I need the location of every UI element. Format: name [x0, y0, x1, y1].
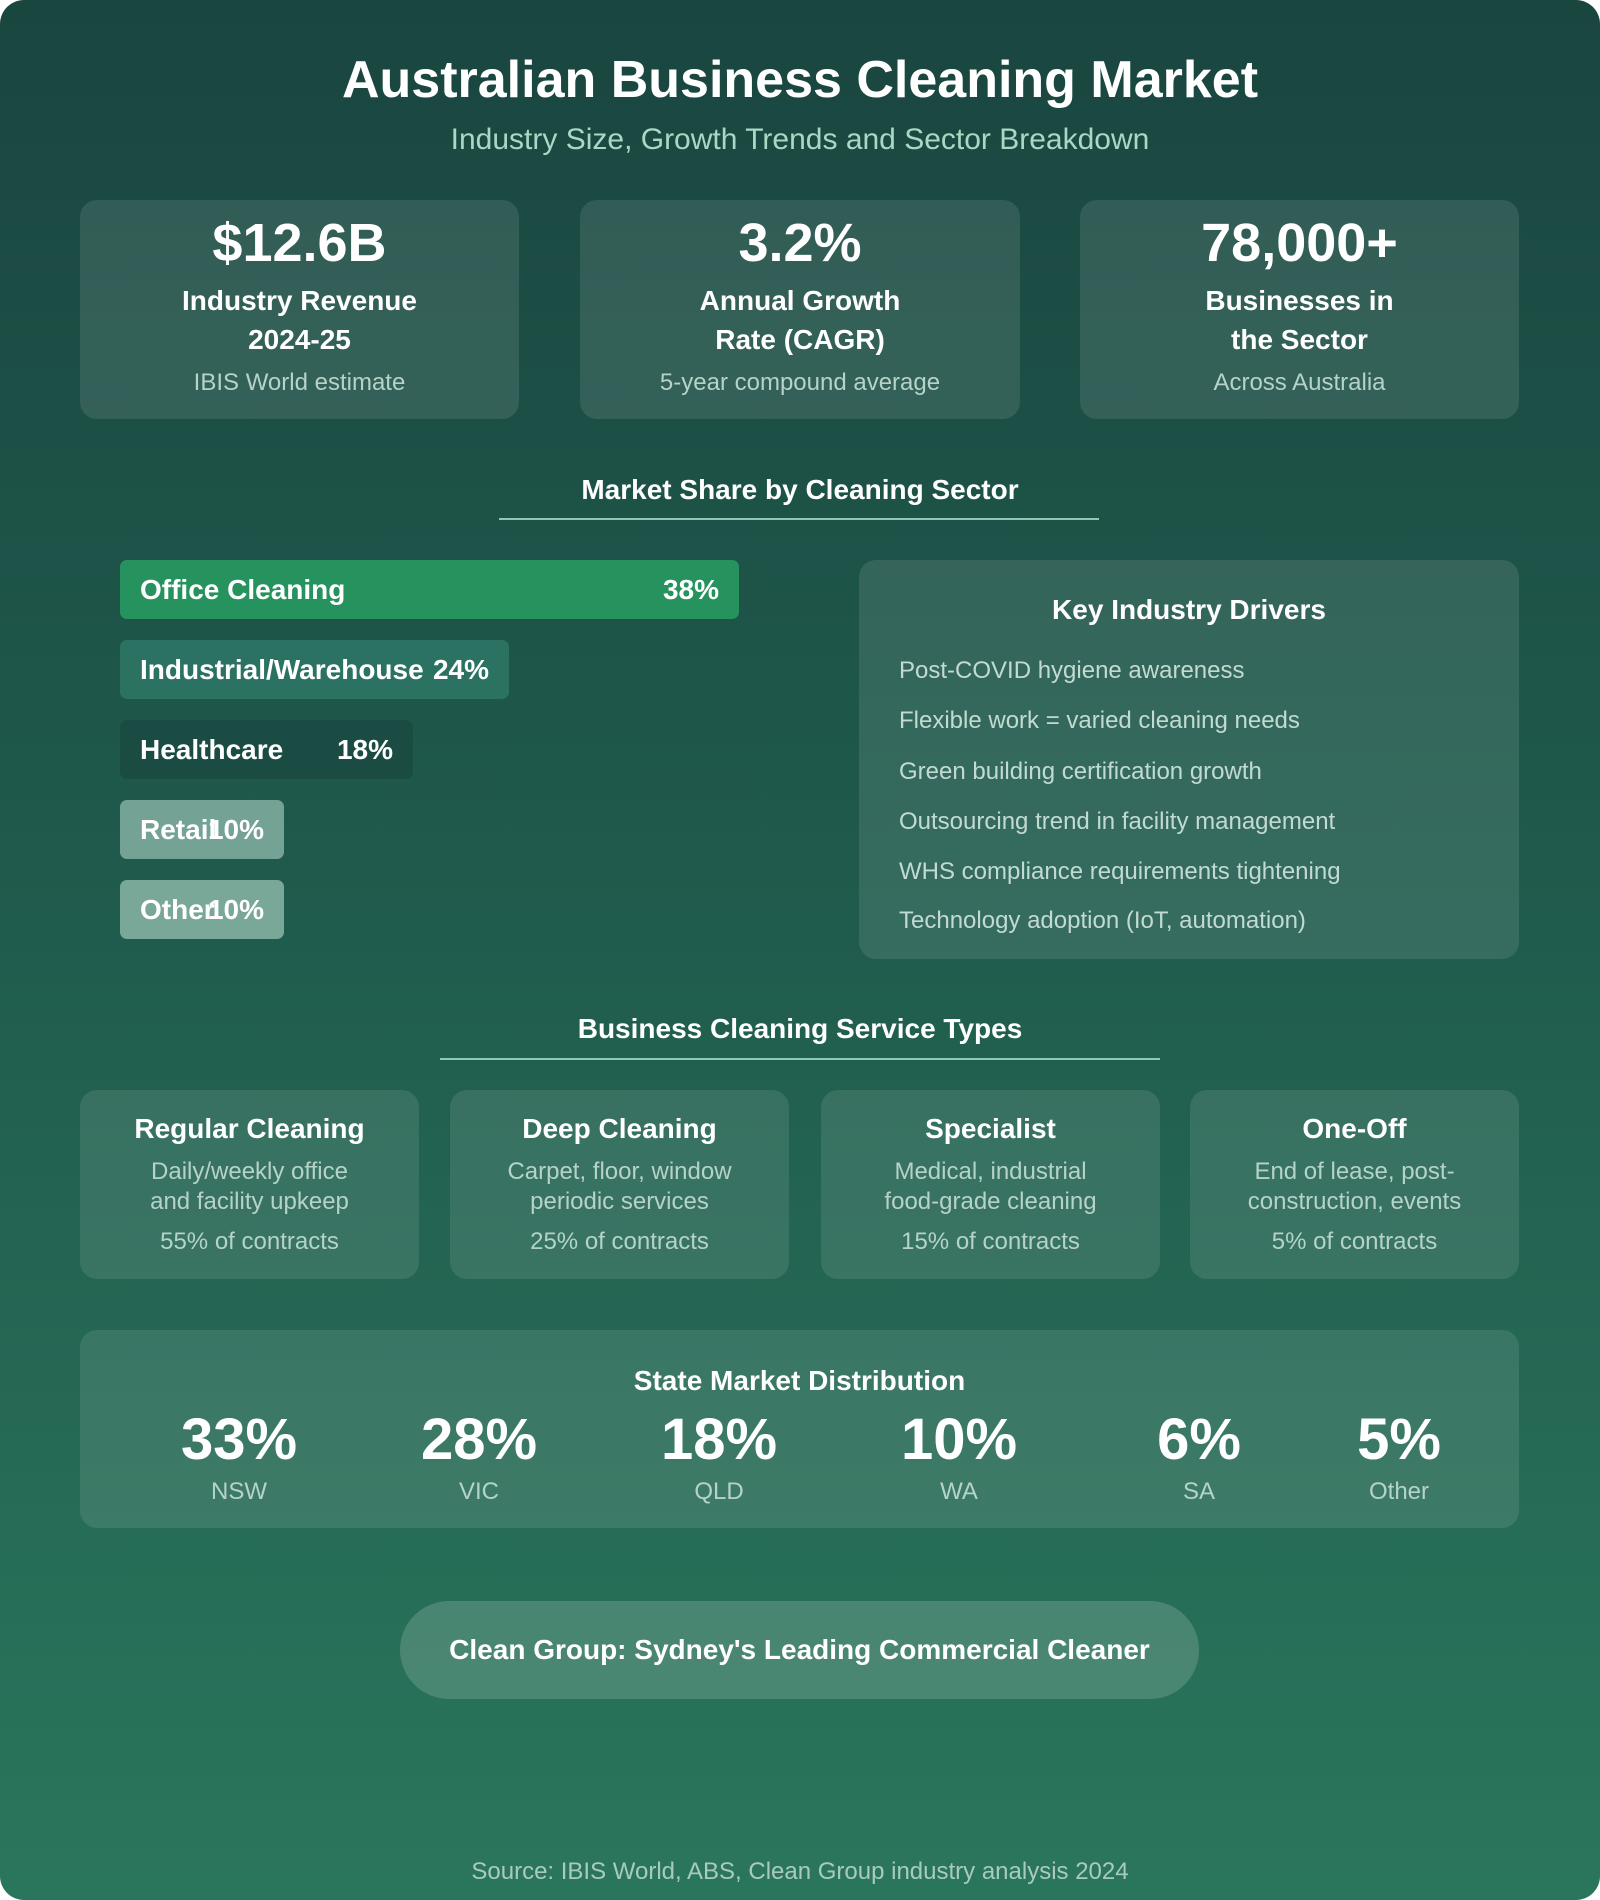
bar: retail: 10%: [208, 814, 264, 845]
service card: specialist: 15% of contracts: [901, 1228, 1080, 1255]
service card: regular: Regular Cleaning: [134, 1113, 365, 1144]
service card: regular: Daily/weekly office: [151, 1158, 348, 1185]
service card: deep: periodic services: [530, 1188, 709, 1215]
bar: retail: Retail: [140, 814, 216, 845]
stat card: growth: Annual Growth: [700, 285, 900, 316]
bar: other: Other: [140, 894, 215, 925]
bar: other: 10%: [208, 894, 264, 925]
stat card: businesses: the Sector: [1231, 324, 1368, 355]
stat card: revenue: [80, 200, 519, 419]
service card: one-off: construction, events: [1248, 1188, 1461, 1215]
bar chart: market share: [120, 560, 739, 939]
bar: industrial: Industrial/Warehouse: [140, 654, 424, 685]
stat: SA: [1157, 1407, 1241, 1505]
service card: one-off: End of lease, post-: [1254, 1158, 1455, 1185]
panel: state distribution: 18%: [661, 1407, 777, 1472]
stat card: revenue: $12.6B: [212, 213, 387, 273]
panel: state distribution: 10%: [901, 1407, 1017, 1472]
service card: specialist: [821, 1090, 1160, 1279]
panel: state distribution: WA: [940, 1478, 978, 1505]
service card: deep: Deep Cleaning: [522, 1113, 717, 1144]
stat card: growth: [580, 200, 1020, 419]
panel: state distribution: 6%: [1157, 1407, 1241, 1472]
bar: office: Office Cleaning: [140, 574, 345, 605]
stat: QLD: [661, 1407, 777, 1505]
stat card: revenue: Industry Revenue: [182, 285, 417, 316]
panel: key drivers: Post-COVID hygiene awareness: [899, 657, 1244, 684]
service card: regular: 55% of contracts: [160, 1228, 339, 1255]
service card: deep: 25% of contracts: [530, 1228, 709, 1255]
panel: state distribution: NSW: [211, 1478, 267, 1505]
stat: VIC: [421, 1407, 537, 1505]
callout button: [400, 1601, 1199, 1699]
bar: retail: [120, 800, 284, 859]
stat card: revenue: 2024-25: [248, 324, 351, 355]
panel: key drivers: Technology adoption (IoT, automation): [899, 907, 1306, 934]
stat: WA: [901, 1407, 1017, 1505]
stat card: growth: 5-year compound average: [660, 369, 940, 396]
service card: specialist: food-grade cleaning: [884, 1188, 1097, 1215]
panel: state distribution: 28%: [421, 1407, 537, 1472]
bar: industrial: [120, 640, 509, 699]
subtitle: Industry Size, Growth Trends and Sector Breakdown: [451, 123, 1149, 156]
stat card: businesses: [1080, 200, 1519, 419]
panel: state distribution: State Market Distribution: [634, 1365, 965, 1396]
stat card: growth: Rate (CAGR): [715, 324, 885, 355]
service card: specialist: Medical, industrial: [894, 1158, 1087, 1185]
panel: key drivers: Flexible work = varied cleaning needs: [899, 707, 1300, 734]
panel: key drivers: Key Industry Drivers: [1052, 594, 1326, 625]
service card: deep: Carpet, floor, window: [507, 1158, 732, 1185]
stat: NSW: [181, 1407, 297, 1505]
panel: key drivers: Outsourcing trend in facility management: [899, 808, 1335, 835]
title: Australian Business Cleaning Market: [342, 51, 1258, 109]
stat card: growth: 3.2%: [738, 213, 862, 273]
service card: one-off: One-Off: [1302, 1113, 1407, 1144]
stat card: businesses: Across Australia: [1213, 369, 1386, 396]
bar: healthcare: [120, 720, 413, 779]
panel: state distribution: Other: [1369, 1478, 1429, 1505]
bar: healthcare: Healthcare: [140, 734, 283, 765]
panel: state distribution: 5%: [1357, 1407, 1441, 1472]
callout button: Clean Group: Sydney's Leading Commercial Cleaner: [449, 1634, 1150, 1665]
service card: regular: and facility upkeep: [150, 1188, 349, 1215]
panel: key drivers: [859, 560, 1519, 959]
stat: Other: [1357, 1407, 1441, 1505]
service card: specialist: Specialist: [925, 1113, 1056, 1144]
panel: state distribution: SA: [1183, 1478, 1215, 1505]
heading: market share: Market Share by Cleaning Sector: [581, 474, 1019, 505]
bar: healthcare: 18%: [337, 734, 393, 765]
panel: state distribution: VIC: [459, 1478, 499, 1505]
stat card: revenue: IBIS World estimate: [194, 369, 405, 396]
bar: office: 38%: [663, 574, 719, 605]
panel: state distribution: [80, 1330, 1519, 1528]
panel: key drivers: Green building certification growth: [899, 758, 1262, 785]
service card: one-off: [1190, 1090, 1519, 1279]
bar: other: [120, 880, 284, 939]
panel: key drivers: WHS compliance requirements tightening: [899, 858, 1341, 885]
bar: office: [120, 560, 739, 619]
service card: regular: [80, 1090, 419, 1279]
service card: deep: [450, 1090, 789, 1279]
service card: one-off: 5% of contracts: [1272, 1228, 1437, 1255]
source: Source: IBIS World, ABS, Clean Group industry analysis 2024: [471, 1858, 1129, 1885]
heading: service types: Business Cleaning Service Types: [578, 1013, 1022, 1044]
panel: state distribution: QLD: [694, 1478, 744, 1505]
bar: industrial: 24%: [433, 654, 489, 685]
stat card: businesses: 78,000+: [1201, 213, 1398, 273]
panel: state distribution: 33%: [181, 1407, 297, 1472]
stat card: businesses: Businesses in: [1205, 285, 1394, 316]
